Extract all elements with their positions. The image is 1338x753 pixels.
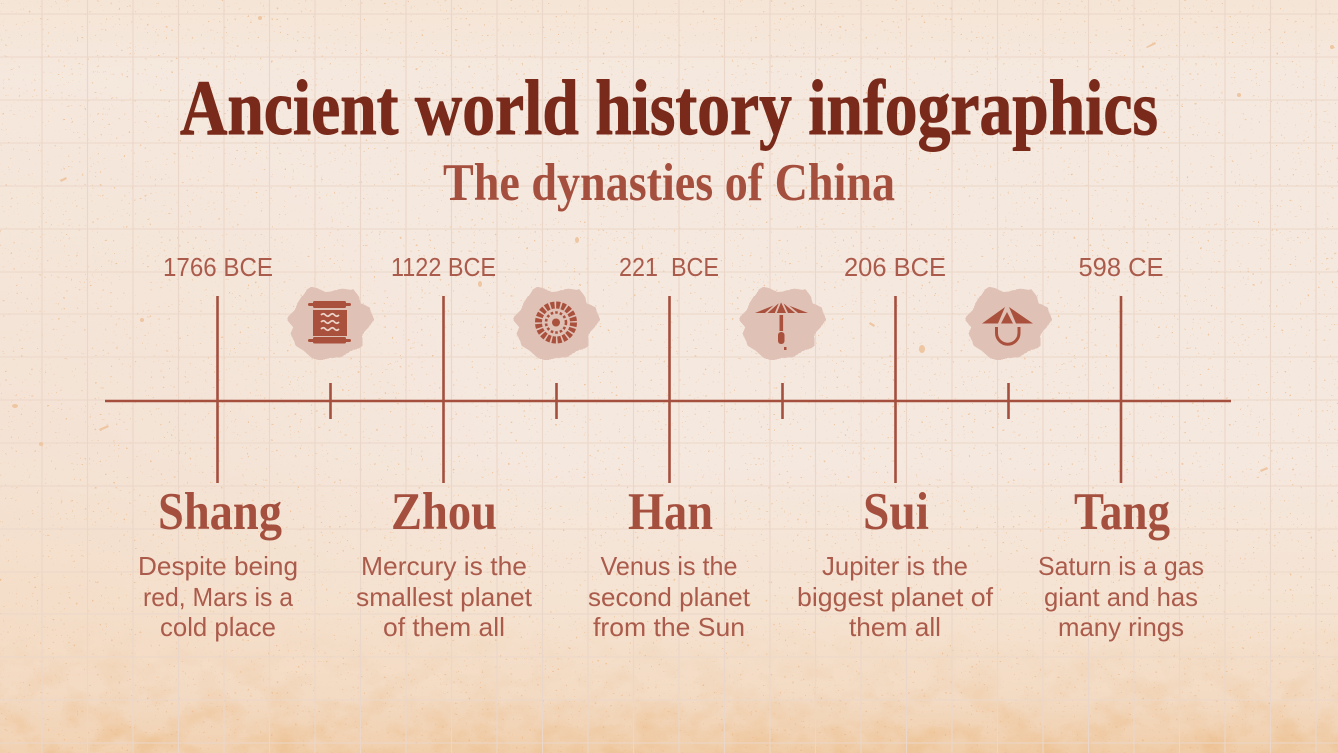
icon: umbrella	[741, 289, 823, 357]
dynasty: Sui: Jupiter is the	[822, 551, 968, 581]
date labels: 221 BCE	[619, 252, 719, 282]
dynasty: Sui	[797, 483, 994, 642]
dynasty: Han: second planet	[588, 582, 751, 612]
dynasty: Tang: many rings	[1058, 612, 1184, 642]
dynasty: Han	[588, 483, 751, 642]
dynasty: Zhou	[356, 483, 533, 642]
subtitle: The dynasties of China	[443, 154, 895, 212]
date labels: 1766 BCE	[163, 252, 273, 282]
dynasty: Tang: Tang	[1074, 483, 1170, 541]
icon: hat	[967, 289, 1049, 357]
dynasty: Sui: Sui	[863, 483, 929, 541]
dynasty: Shang: Despite being	[138, 551, 298, 581]
date labels	[163, 252, 1164, 282]
date labels: 1122 BCE	[391, 252, 496, 282]
timeline	[105, 296, 1231, 483]
date labels: 206 BCE	[844, 252, 946, 282]
dynasty: Zhou: of them all	[383, 612, 505, 642]
dynasty: Shang: red, Mars is a	[143, 582, 294, 612]
title: Ancient world history infographics	[180, 64, 1158, 151]
icon: wheel	[515, 289, 597, 357]
dynasty: Tang	[1038, 483, 1204, 642]
icon: scroll	[289, 289, 371, 357]
dynasty: Zhou: smallest planet	[356, 582, 533, 612]
dynasty: Shang	[138, 483, 298, 642]
dynasty: Sui: biggest planet of	[797, 582, 994, 612]
dynasty: Sui: them all	[849, 612, 941, 642]
dynasty: Zhou: Zhou	[391, 483, 497, 541]
dynasty: Tang: giant and has	[1044, 582, 1198, 612]
dynasty: Shang: Shang	[158, 483, 282, 541]
dynasty: Han: Venus is the	[600, 551, 738, 581]
dynasty: Shang: cold place	[160, 612, 276, 642]
dynasty: Han: Han	[628, 483, 713, 541]
dynasty: Tang: Saturn is a gas	[1038, 551, 1204, 581]
dynasty: Han: from the Sun	[593, 612, 745, 642]
dynasty: Zhou: Mercury is the	[361, 551, 527, 581]
date labels: 598 CE	[1078, 252, 1164, 282]
